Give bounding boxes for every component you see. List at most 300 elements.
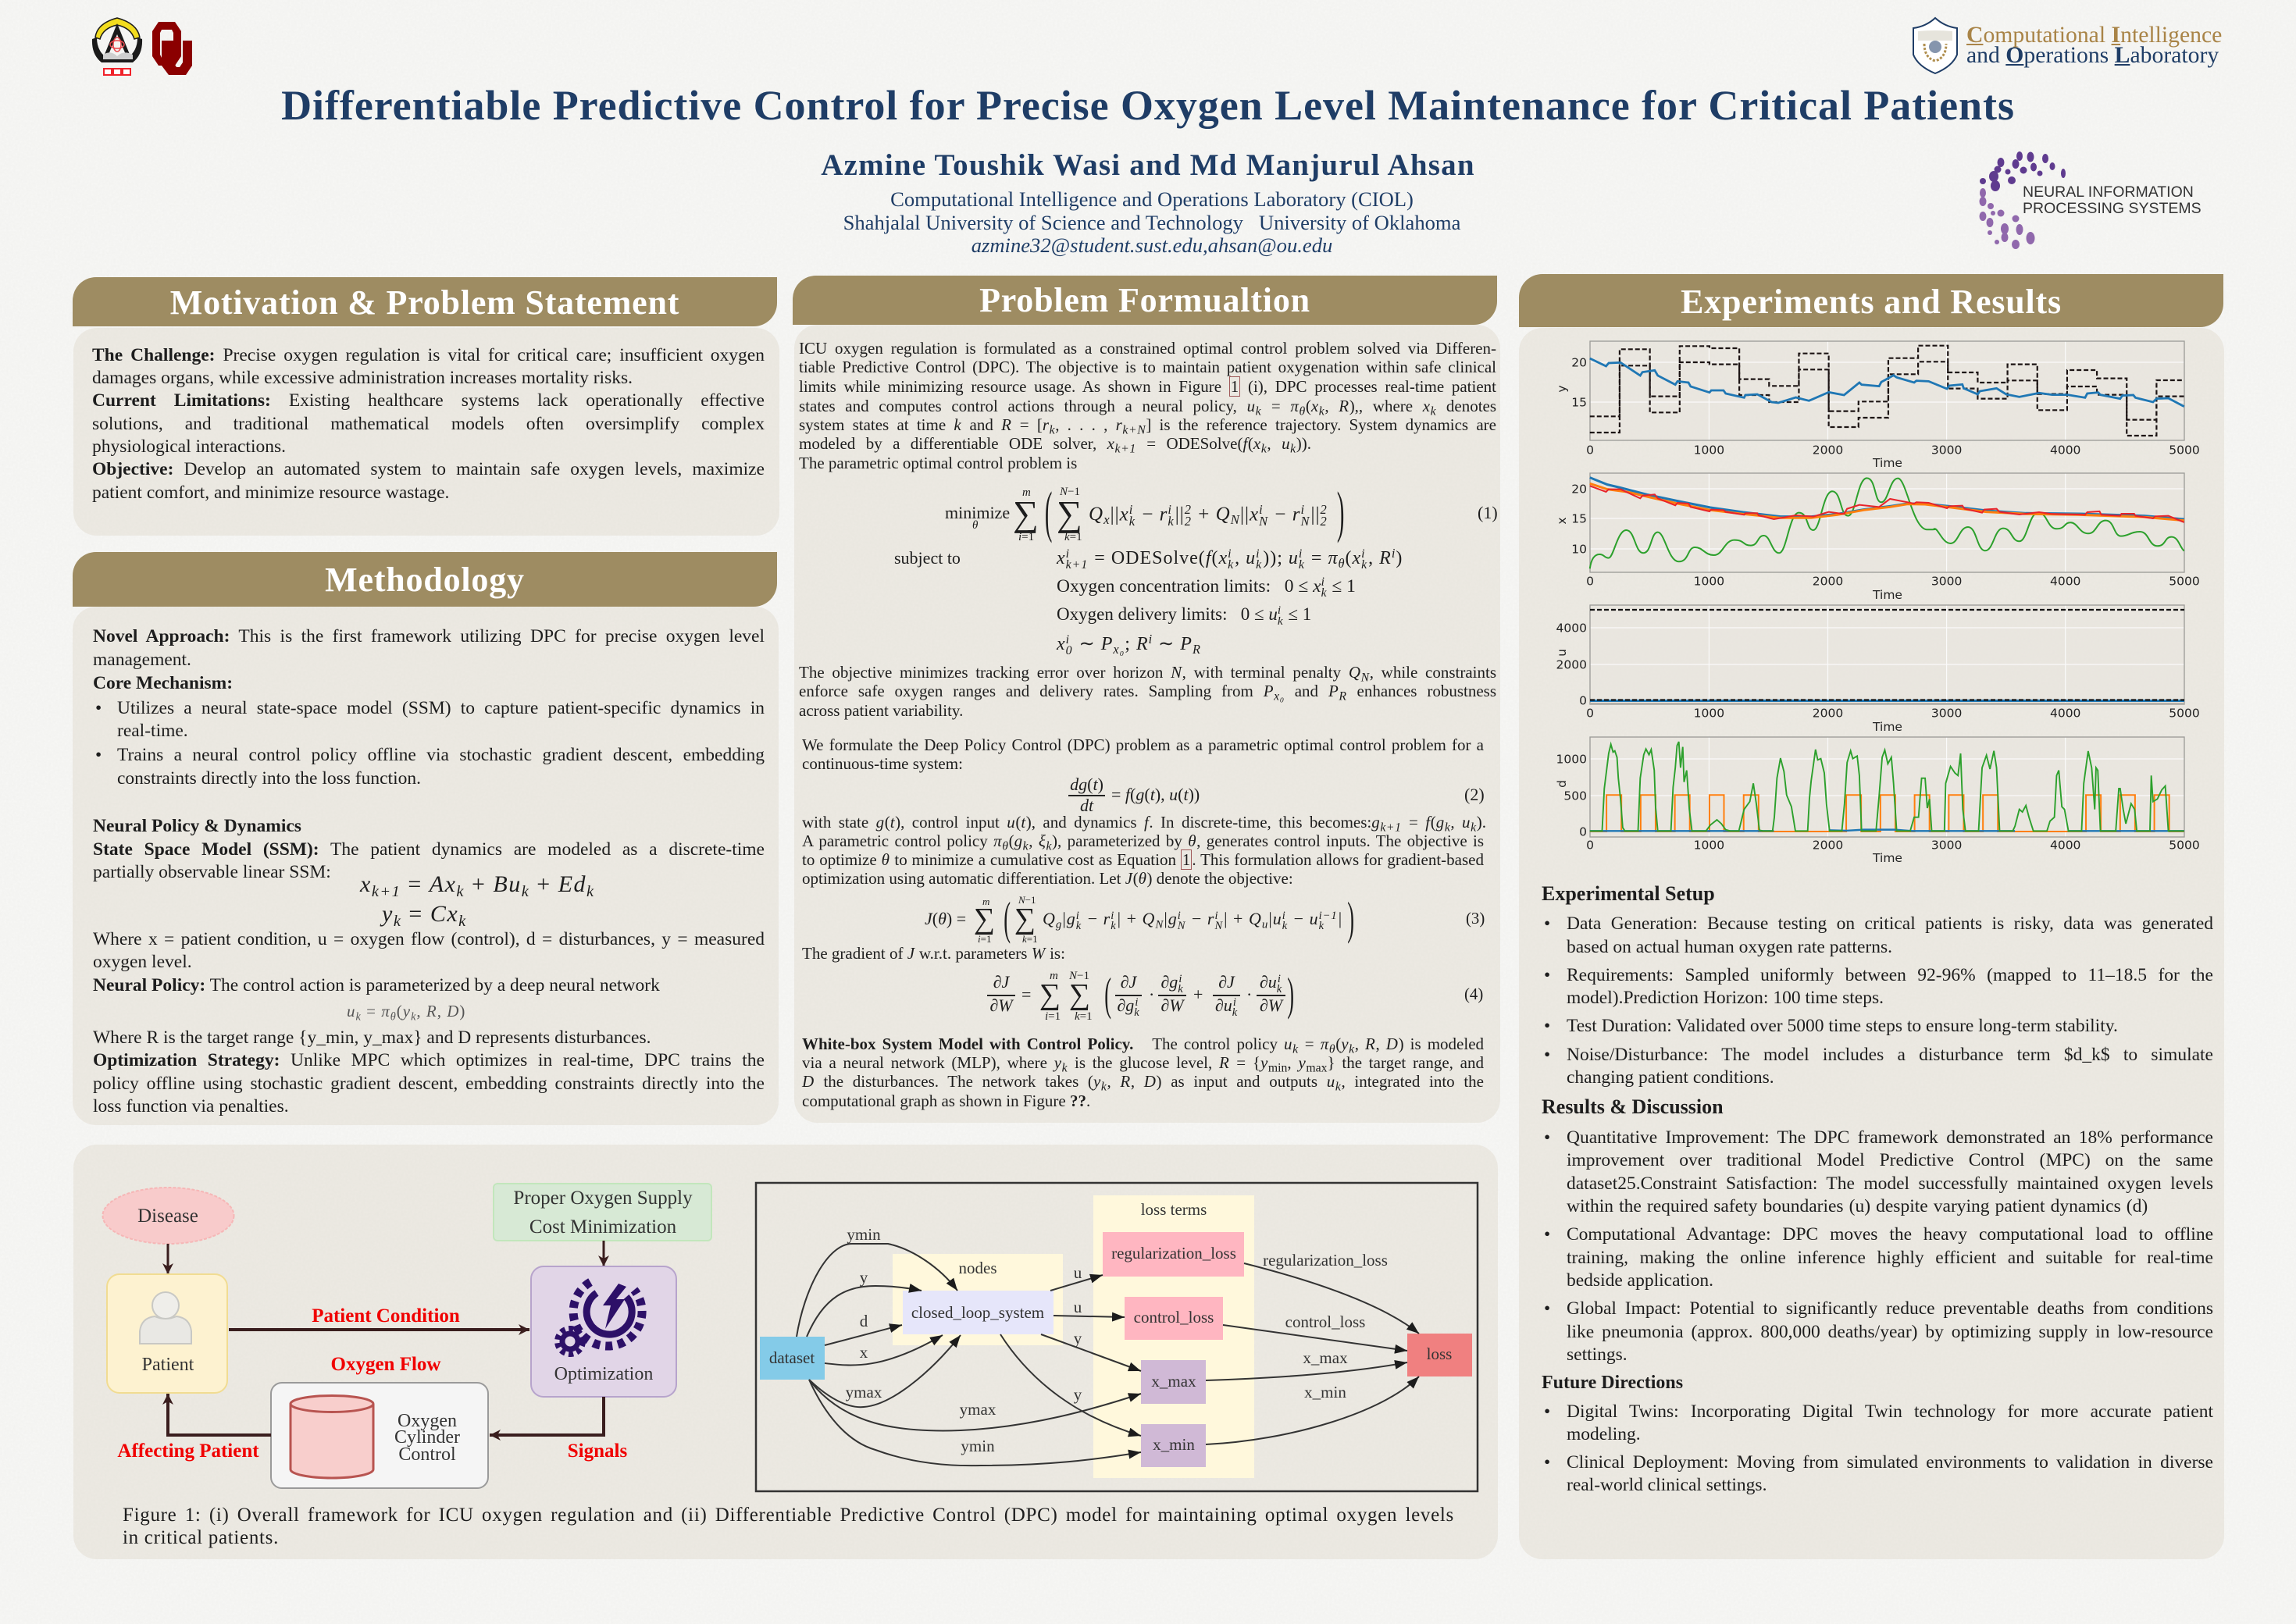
chart: y vs time: [1555, 341, 2200, 470]
equation 3: objective: J(θ) =: [925, 909, 966, 928]
equation 3: objective: i: [1178, 910, 1182, 922]
equation 4: gradient: ∂W: [1260, 995, 1282, 1015]
equation 1: optimal control problem: k: [1168, 514, 1175, 529]
chart: y vs time: 0: [1586, 443, 1594, 458]
arrow: disease to patient: [167, 1244, 169, 1274]
chart: x vs time: Time: [1872, 588, 1902, 602]
text: problem formulation intro: [799, 339, 1496, 472]
chart: x vs time: 2000: [1813, 575, 1843, 589]
heading: problem formulation: [793, 276, 1497, 325]
equation 3: objective: Qg|g − r | + QN|g − r | + Qu|u − u |: [1043, 909, 1342, 931]
panel: methodology body: [73, 607, 779, 1125]
equation 4: gradient: ∑: [1039, 978, 1061, 1011]
equation 1: optimal control problem: ): [1337, 479, 1344, 544]
edge labels: regularization_loss: [1263, 1251, 1388, 1270]
cluster: nodes: [893, 1254, 1063, 1345]
equation 1: optimal control problem: Oxygen delivery limits: 0 ≤ u ≤ 1: [1057, 604, 1311, 624]
affiliation: azmine32@student.sust.edu,ahsan@ou.edu: [972, 233, 1332, 257]
chart: d vs time: [1555, 737, 2200, 865]
text: experimental setup: •: [1544, 965, 1550, 985]
heading: motivation: Motivation & Problem Statement: [170, 283, 679, 322]
chart: d vs time: 1000: [1694, 839, 1724, 853]
text: gradient intro: The gradient of J w.r.t. parameters W is:: [802, 944, 1065, 963]
equation 1: optimal control problem: k: [1129, 514, 1136, 529]
logo text: CIOL: and Operations Laboratory: [1966, 43, 2219, 68]
text: methodology: [93, 626, 765, 1116]
equation 1: optimal control problem: 2: [1321, 502, 1328, 517]
equation 1: optimal control problem: i: [1321, 575, 1324, 589]
equation 4: gradient: i: [1135, 996, 1138, 1009]
equation 1: optimal control problem: i: [1299, 547, 1303, 561]
equation 4: gradient: ∂W: [989, 995, 1013, 1015]
chart: x vs time: 4000: [2050, 575, 2080, 589]
equation 3: objective: i: [1111, 910, 1114, 922]
heading: methodology: [73, 552, 777, 607]
chart: u vs time: 5000: [2169, 706, 2200, 720]
equation 1: optimal control problem: N: [1259, 514, 1268, 529]
equation 1: optimal control problem: k: [1278, 614, 1283, 628]
text: experimental setup: Requirements: Sampled uniformly between 92-96% (mapped to 11–18.5 for the: [1567, 965, 2213, 985]
edge labels: d: [860, 1312, 868, 1330]
chart: u vs time: u: [1555, 649, 1569, 657]
text: experimental setup: Test Duration: Validated over 5000 time steps to ensure long-term stability.: [1567, 1016, 2118, 1036]
text: experimental setup: •: [1544, 914, 1550, 934]
edge labels: x_min: [1304, 1383, 1346, 1401]
equation 2: dynamics: (2): [1464, 785, 1485, 804]
label: oxygen flow: Oxygen Flow: [331, 1354, 440, 1375]
chart: d vs time: 1000: [1556, 753, 1587, 767]
equation 1: optimal control problem: i: [1228, 547, 1232, 561]
chart: y vs time: 1000: [1694, 443, 1724, 458]
equation 3: objective: N: [1178, 920, 1185, 932]
text: results and discussion: within the required safety boundaries (u) despite varying patient dynamics (d): [1567, 1196, 2148, 1216]
equation 1: optimal control problem: (1): [1478, 503, 1498, 522]
text: methodology: constraints directly into the loss function.: [117, 768, 421, 789]
equation: state space: [359, 871, 595, 930]
edge labels: control_loss: [1285, 1312, 1365, 1331]
text: methodology: Trains a neural control policy offline via stochastic gradient descent, embedding: [117, 745, 765, 765]
affiliation: Computational Intelligence and Operations Laboratory (CIOL): [890, 187, 1414, 211]
equation 4: gradient: ·: [1149, 985, 1154, 1004]
equation 3: objective: i=1: [978, 933, 991, 945]
chart: x vs time: 0: [1586, 575, 1594, 589]
equation 4: gradient: [987, 967, 1483, 1023]
node: closed loop system: [903, 1291, 1054, 1334]
text: methodology: Where x = patient condition, u = oxygen flow (control), d = disturbances, y = measured: [93, 929, 765, 949]
equation 2: dynamics: dt: [1080, 796, 1093, 815]
node: control loss: control_loss: [1134, 1308, 1214, 1327]
affiliation: [843, 187, 1460, 257]
logo text: NeurIPS: PROCESSING SYSTEMS: [2023, 200, 2202, 217]
text: experimental setup: •: [1544, 1016, 1550, 1036]
text: methodology: Neural Policy: The control action is parameterized by a deep neural network: [93, 975, 660, 995]
heading: experiments: Experiments and Results: [1681, 283, 2062, 321]
text: motivation: [92, 345, 765, 503]
edge labels: u: [1074, 1263, 1082, 1282]
text: motivation: solutions, and traditional mathematical models often oversimplify complex: [92, 414, 765, 434]
equation 4: gradient: =: [1021, 985, 1031, 1004]
text: methodology: Utilizes a neural state-space model (SSM) to capture patient-specific dynamics in: [117, 698, 765, 718]
chart: y vs time: 5000: [2169, 443, 2200, 458]
equation 3: objective: ∑: [974, 903, 995, 935]
equation 4: gradient: +: [1193, 985, 1203, 1004]
text: results and discussion: •: [1544, 1127, 1550, 1148]
equation 4: gradient: ∂u: [1260, 972, 1277, 992]
text: results and discussion: bedside application.: [1567, 1270, 1713, 1291]
node: dataset: [760, 1337, 825, 1380]
heading: experimental setup: Experimental Setup: [1542, 882, 1715, 905]
equation 1: optimal control problem: subject to: [894, 548, 961, 568]
logo text: NeurIPS: [2023, 183, 2202, 217]
equation 4: gradient: (: [1104, 967, 1111, 1020]
equation 4: gradient: N−1: [1069, 970, 1089, 982]
node: optimization: Optimization: [554, 1364, 653, 1384]
arrow: objectives to optimization: [603, 1241, 604, 1266]
chart: d vs time: 4000: [2050, 839, 2080, 853]
node: dataset: dataset: [769, 1348, 815, 1367]
text: discrete-time policy: to optimize θ to minimize a cumulative cost as Equation 1. This formulation allows for gradient-based: [802, 850, 1484, 869]
equation 3: objective: ): [1347, 892, 1354, 944]
text: problem formulation intro: system states at time k and R = [rk, . . . , rk+N] is the reference trajectory. System dynamics are: [799, 415, 1496, 437]
text: discrete-time policy: with state g(t), control input u(t), and dynamics f. In discrete-time, this becomes:gk+1 = f(gk, uk).: [802, 813, 1486, 835]
chart: u vs time: 4000: [1556, 621, 1587, 636]
edge labels: x_max: [1303, 1348, 1348, 1367]
equation 3: objective: k: [1076, 920, 1082, 932]
affiliation: Shahjalal University of Science and Technology University of Oklahoma: [843, 211, 1460, 234]
chart: u vs time: 4000: [2050, 706, 2080, 720]
equation 4: gradient: k: [1277, 983, 1282, 995]
text: results and discussion: •: [1544, 1224, 1550, 1245]
chart: d vs time: 500: [1563, 789, 1587, 803]
equation 3: objective: N: [1214, 920, 1223, 932]
equation 1: optimal control problem: x = ODESolve(f(x , u )); u = πθ(x , Ri): [1057, 546, 1403, 571]
text: DPC formulation: We formulate the Deep Policy Control (DPC) problem as a parametric optimal control problem for a: [802, 735, 1484, 754]
node: oxygen cylinder control: Oxygen: [398, 1411, 457, 1431]
equation 3: objective: [925, 892, 1485, 945]
node: control loss: [1125, 1297, 1223, 1340]
equation 1: optimal control problem: 2: [1185, 502, 1192, 517]
edge labels: [846, 1225, 1388, 1455]
equation 1: optimal control problem: i: [1168, 502, 1172, 517]
text: results and discussion: Global Impact: Potential to significantly reduce preventable deaths from conditions: [1567, 1298, 2213, 1319]
text: results and discussion: like pneumonia (approx. 800,000 deaths/year) by optimizing supply in low-resource: [1567, 1322, 2213, 1342]
node: loss: [1407, 1334, 1472, 1376]
equation 4: gradient: ∂J: [1121, 972, 1136, 992]
node: disease: Disease: [137, 1206, 198, 1227]
equation 4: gradient: k: [1134, 1006, 1139, 1019]
equation 3: objective: i: [1076, 910, 1080, 922]
chart: d vs time: 0: [1579, 824, 1587, 839]
panel: experiments body: [1519, 328, 2224, 1559]
equation 4: gradient: ∂u: [1215, 995, 1232, 1015]
text: experimental setup: Noise/Disturbance: The model includes a disturbance term $d_k$ to simulate: [1567, 1045, 2213, 1065]
chart: x vs time: 3000: [1931, 575, 1962, 589]
equation 1: optimal control problem: 0: [1066, 644, 1073, 657]
equation 1: optimal control problem: i: [1259, 502, 1264, 517]
text: experimental setup: Data Generation: Because testing on critical patients is risky, data was generated: [1567, 914, 2213, 934]
equation 1: optimal control problem: k: [1228, 558, 1234, 572]
equation 1: optimal control problem: ∑: [1013, 493, 1039, 533]
text: results and discussion: Quantitative Improvement: The DPC framework demonstrated an 18% performance: [1567, 1127, 2213, 1148]
text: methodology: partially observable linear SSM:: [93, 862, 331, 882]
text: problem formulation intro: The parametric optimal control problem is: [799, 454, 1077, 472]
equation 3: objective: ∑: [1014, 903, 1036, 935]
equation 3: objective: i: [1214, 910, 1218, 922]
chart: y vs time: 2000: [1813, 443, 1843, 458]
chart: u vs time: [1555, 605, 2200, 734]
text: experimental setup: based on actual human oxygen rate patterns.: [1567, 937, 1892, 957]
node: regularization loss: regularization_loss: [1111, 1244, 1236, 1263]
text: white-box model: D the disturbances. The network takes (yk, R, D) as input and outputs uk, integrated into the: [802, 1072, 1484, 1094]
equation 1: optimal control problem: i: [1256, 547, 1260, 561]
chart: x vs time: x: [1555, 517, 1569, 525]
text: methodology: •: [95, 698, 102, 718]
authors: Azmine Toushik Wasi and Md Manjurul Ahsan: [821, 148, 1475, 182]
chart: y vs time: 3000: [1931, 443, 1962, 458]
text: methodology: Optimization Strategy: Unlike MPC which optimizes in real-time, DPC trains the: [93, 1050, 765, 1070]
equation 1: optimal control problem: 2: [1321, 514, 1328, 529]
node: disease: [103, 1188, 234, 1244]
label: signals: Signals: [568, 1441, 627, 1462]
heading: results and discussion: Results & Discussion: [1542, 1095, 1724, 1118]
chart: d vs time: 3000: [1931, 839, 1962, 853]
text: results and discussion: dataset25.Constraint Satisfaction: The model successfully maintained oxygen levels: [1567, 1173, 2213, 1194]
text: future directions: •: [1544, 1452, 1550, 1473]
node: closed loop system: closed_loop_system: [911, 1303, 1044, 1322]
node: x max: x_max: [1151, 1372, 1196, 1391]
equation 1: optimal control problem: i: [1301, 502, 1305, 517]
text: methodology: Where R is the target range {y_min, y_max} and D represents disturbances.: [93, 1027, 651, 1048]
chart: d vs time: d: [1555, 780, 1569, 788]
chart: x vs time: 10: [1571, 542, 1587, 556]
equation 1: optimal control problem: x ∼ Px₀; Ri ∼ PR: [1057, 632, 1201, 657]
equation 1: optimal control problem: i=1: [1018, 531, 1034, 543]
text: future directions: [1542, 1369, 2213, 1499]
node: cost objectives: [494, 1184, 711, 1241]
equation 4: gradient: ∂J: [993, 972, 1009, 992]
text: objective explanation: [799, 663, 1496, 720]
edge labels: x: [860, 1343, 868, 1362]
chart: x vs time: 20: [1571, 483, 1587, 497]
text: methodology: management.: [93, 650, 191, 670]
label: affecting patient: Affecting Patient: [117, 1441, 259, 1462]
equation 1: optimal control problem: N−1: [1060, 486, 1080, 498]
edges: [797, 1244, 1419, 1466]
text: methodology: Neural Policy & Dynamics: [93, 816, 301, 836]
equation 3: objective: i: [1282, 910, 1286, 922]
logo: CIOL shield: [1913, 18, 1957, 73]
equation 1: optimal control problem: k=1: [1064, 531, 1082, 543]
equation 1: optimal control problem: k: [1361, 558, 1367, 572]
equation 3: objective: k: [1111, 920, 1117, 932]
node: oxygen cylinder control: [271, 1383, 488, 1488]
text: future directions: modeling.: [1567, 1424, 1641, 1444]
node: cost objectives: Proper Oxygen Supply: [513, 1188, 693, 1209]
chart: y vs time: Time: [1872, 456, 1902, 470]
equation 3: objective: k: [1282, 920, 1288, 932]
text: methodology: Novel Approach: This is the first framework utilizing DPC for precise oxygen level: [93, 626, 765, 646]
equation 1: optimal control problem: (: [1045, 479, 1052, 544]
text: objective explanation: enforce safe oxygen ranges and delivery rates. Sampling from Px₀ and PR enhances robustness: [799, 682, 1496, 703]
equation 4: gradient: ): [1287, 967, 1294, 1020]
equation 4: gradient: k=1: [1075, 1010, 1093, 1023]
logo: OU: [152, 22, 192, 75]
text: DPC formulation: [802, 735, 1484, 773]
text: experimental setup: •: [1544, 1045, 1550, 1065]
node: regularization loss: [1103, 1232, 1244, 1277]
chart: d vs time: 5000: [2169, 839, 2200, 853]
text: results and discussion: settings.: [1567, 1344, 1628, 1365]
cluster: nodes: nodes: [959, 1259, 996, 1277]
equation 1: optimal control problem: i: [1129, 502, 1133, 517]
text: results and discussion: [1542, 1093, 2213, 1368]
text: objective explanation: The objective minimizes tracking error over horizon N, with terminal penalty QN, while constraints: [799, 663, 1496, 685]
text: methodology: State Space Model (SSM): The patient dynamics are modeled as a discrete-time: [93, 839, 765, 860]
heading: motivation: [73, 277, 777, 326]
text: discrete-time policy: [802, 813, 1486, 888]
equation 1: optimal control problem: N: [1301, 514, 1310, 529]
equation 3: objective: (: [1004, 892, 1011, 944]
text: experimental setup: [1542, 881, 2213, 1090]
node: patient: Patient: [142, 1355, 194, 1375]
text: problem formulation intro: modeled by a differentiable ODE solver, xk+1 = ODESolve(f(xk, uk)).: [799, 434, 1311, 456]
node: x min: x_min: [1153, 1435, 1195, 1454]
text: problem formulation intro: limits while minimizing resource usage. As shown in Figure 1 (i), DPC processes real-time patient: [799, 377, 1496, 396]
equation 3: objective: i−1: [1319, 910, 1338, 922]
figure caption: [123, 1504, 1454, 1551]
text: results and discussion: •: [1544, 1298, 1550, 1319]
chart: d vs time: 0: [1586, 839, 1594, 853]
node: oxygen cylinder control: Cylinder: [394, 1427, 460, 1448]
equation 3: objective: N−1: [1018, 894, 1036, 906]
chart: u vs time: 2000: [1813, 706, 1843, 720]
equation 4: gradient: ∂g: [1160, 972, 1178, 992]
chart: u vs time: 2000: [1556, 657, 1587, 671]
equation 1: optimal control problem: k: [1321, 586, 1326, 600]
text: motivation: damages organs, while excessive administration increases mortality risks.: [92, 368, 633, 388]
node: cost objectives: Cost Minimization: [529, 1216, 677, 1238]
equation 4: gradient: ·: [1246, 985, 1252, 1004]
node: loss: loss: [1427, 1344, 1452, 1363]
chart: x vs time: [1555, 473, 2200, 602]
text: motivation: Current Limitations: Existing healthcare systems lack operationally effective: [92, 390, 765, 411]
panel: problem formulation body: [794, 325, 1500, 1123]
text: results and discussion: training, making the online inference highly efficient and suitable for real-time: [1567, 1248, 2213, 1268]
text: future directions: •: [1544, 1401, 1550, 1422]
text: methodology: •: [95, 745, 102, 765]
text: motivation: The Challenge: Precise oxygen regulation is vital for critical care; insufficient oxygen: [92, 345, 765, 365]
equation 4: gradient: k: [1232, 1006, 1237, 1019]
equation 4: gradient: i: [1178, 973, 1182, 985]
equation 1: optimal control problem: k: [1299, 558, 1305, 572]
equation 4: gradient: (4): [1464, 985, 1483, 1003]
equation 1: optimal control problem: i: [1278, 604, 1281, 617]
edge labels: y: [860, 1268, 868, 1287]
panel: figure: [73, 1145, 1498, 1559]
node: x max: [1141, 1360, 1206, 1404]
text: discrete-time policy: A parametric control policy πθ(gk, ξk), parameterized by θ, generates control inputs. The objective is: [802, 832, 1484, 853]
equation 4: gradient: i: [1278, 973, 1281, 985]
equation 1: optimal control problem: k+1: [1066, 558, 1088, 572]
title: Differentiable Predictive Control for Precise Oxygen Level Maintenance for Critical Patients: [281, 82, 2015, 129]
figure caption: Figure 1: (i) Overall framework for ICU oxygen regulation and (ii) Differentiable Predictive Control (DPC) model for maintaining optimal oxygen levels: [123, 1505, 1454, 1526]
equation 3: objective: k=1: [1022, 933, 1038, 945]
text: problem formulation intro: ICU oxygen regulation is formulated as a constrained optimal control problem solved via Differen-: [799, 339, 1496, 358]
text: methodology: policy offline using stochastic gradient descent, embedding constraints directly into the: [93, 1074, 765, 1094]
chart: x vs time: 15: [1571, 512, 1587, 526]
text: results and discussion: Computational Advantage: DPC moves the heavy computational load to offline: [1567, 1224, 2213, 1245]
chart: d vs time: 2000: [1813, 839, 1843, 853]
text: results and discussion: improvement over traditional Model Predictive Control (MPC) on the same: [1567, 1150, 2213, 1170]
equation 3: objective: k: [1319, 920, 1324, 932]
chart: y vs time: y: [1555, 385, 1569, 393]
edge labels: u: [1074, 1298, 1082, 1316]
heading: problem formulation: Problem Formualtion: [979, 281, 1310, 319]
equation 4: gradient: ∂W: [1160, 995, 1184, 1015]
edge labels: ymin: [961, 1437, 995, 1455]
equation 1: optimal control problem: i: [1361, 547, 1366, 561]
node: x min: [1141, 1424, 1206, 1467]
text: white-box model: computational graph as shown in Figure ??.: [802, 1092, 1090, 1110]
chart: u vs time: Time: [1872, 720, 1902, 734]
text: future directions: real-world clinical settings.: [1567, 1475, 1767, 1495]
chart: u vs time: 3000: [1931, 706, 1962, 720]
equation 4: gradient: ∂J: [1218, 972, 1235, 992]
text: future directions: Clinical Deployment: Moving from simulated environments to validation in diverse: [1567, 1452, 2213, 1473]
text: methodology: oxygen level.: [93, 952, 192, 972]
equation 1: optimal control problem: Qx||x − r || + QN||x − r ||: [1089, 504, 1321, 527]
text: motivation: patient comfort, and minimize resource wastage.: [92, 483, 449, 503]
cluster: loss terms: [1093, 1195, 1254, 1478]
heading: methodology: Methodology: [325, 561, 525, 599]
edge labels: y: [1074, 1329, 1082, 1348]
equation 1: optimal control problem: Oxygen concentration limits: 0 ≤ x ≤ 1: [1057, 576, 1356, 597]
arrow: optimization to cylinder: [490, 1397, 604, 1435]
text: methodology: Core Mechanism:: [93, 673, 233, 693]
equation 3: objective: (3): [1466, 910, 1485, 928]
text: methodology: real-time.: [117, 721, 188, 741]
text: future directions: Digital Twins: Incorporating Digital Twin technology for more accurate patient: [1567, 1401, 2213, 1422]
text: problem formulation intro: states and computes control actions through a neural policy, uk = πθ(xk, R),, where xk denotes: [799, 397, 1496, 418]
node: patient: [107, 1274, 227, 1393]
logo text: CIOL: [1966, 23, 2222, 68]
node: oxygen cylinder control: Control: [398, 1444, 456, 1465]
chart: u vs time: 0: [1579, 693, 1587, 707]
panel: motivation body: [73, 328, 779, 536]
icon: gears: [558, 1282, 642, 1354]
text: motivation: Objective: Develop an automated system to maintain safe oxygen levels, maximize: [92, 459, 765, 479]
text: experimental setup: model).Prediction Horizon: 100 time steps.: [1567, 988, 1884, 1008]
heading: future directions: Future Directions: [1542, 1373, 1683, 1393]
label: patient condition: Patient Condition: [312, 1305, 460, 1327]
text: DPC formulation: continuous-time system:: [802, 754, 963, 773]
chart: y vs time: 15: [1571, 395, 1587, 409]
chart: x vs time: 5000: [2169, 575, 2200, 589]
chart: y vs time: 20: [1571, 356, 1587, 370]
diagram: DPC computational graph: [756, 1183, 1478, 1491]
text: motivation: physiological interactions.: [92, 436, 286, 457]
logo: NeurIPS dots: [1979, 151, 2066, 249]
logo text: CIOL: Computational Intelligence: [1966, 23, 2222, 48]
logo: SUST: [92, 18, 142, 75]
diagram: overall framework: [103, 1184, 711, 1488]
text: white-box model: White-box System Model with Control Policy. The control policy uk = πθ(yk, R, D) is modeled: [802, 1035, 1484, 1056]
text: discrete-time policy: optimization using automatic differentiation. Let J(θ) denote the objective:: [802, 869, 1293, 888]
equation 1: optimal control problem: i: [1066, 633, 1070, 646]
equation 1: optimal control problem: m: [1022, 486, 1031, 499]
edge labels: y: [1074, 1385, 1082, 1404]
chart: x vs time: 1000: [1694, 575, 1724, 589]
